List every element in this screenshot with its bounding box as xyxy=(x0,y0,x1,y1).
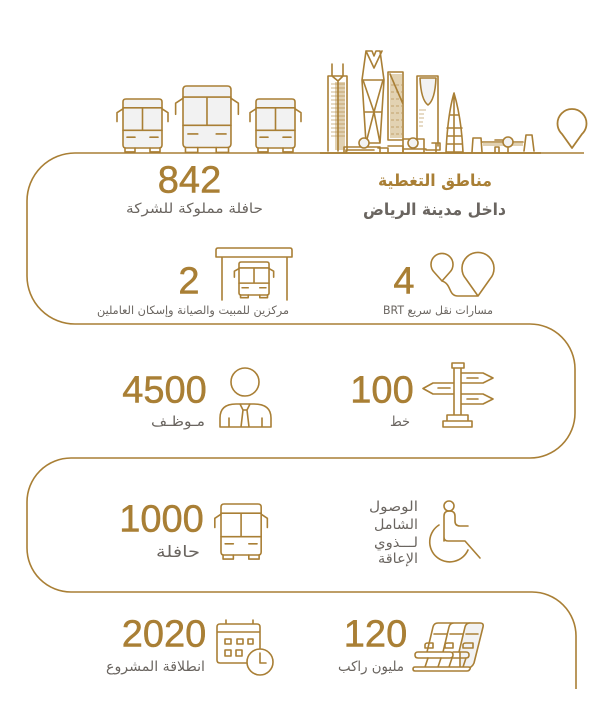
icon: Riyadh skyline xyxy=(320,51,541,153)
text: accessibility: لـــذوي xyxy=(374,535,418,551)
stat: 2020 project launch: انطلاقة المشروع xyxy=(106,659,205,675)
stat: 120 million riders xyxy=(338,614,407,675)
icon: bus depot shelter xyxy=(216,248,292,300)
stat: 842 owned buses: حافلة مملوكة للشركة xyxy=(126,201,263,217)
stat: 2020 project launch xyxy=(106,614,206,675)
stat: 100 lines: 100 xyxy=(350,370,414,412)
stat: 4 BRT routes: مسارات نقل سريع BRT xyxy=(383,303,493,318)
stat: 2 depots: مركزين للمبيت والصيانة وإسكان العاملين xyxy=(97,303,289,318)
stat: 4 BRT routes: 4 xyxy=(393,260,415,302)
icon: signpost xyxy=(423,363,493,427)
winding route line xyxy=(27,153,584,689)
stat: 2020 project launch: 2020 xyxy=(122,614,206,656)
icon: location pin xyxy=(558,109,586,148)
text: accessibility: الإعاقة xyxy=(378,551,418,567)
icon: bus seats xyxy=(413,623,483,671)
stat: 4500 employees xyxy=(122,370,207,430)
stat: 120 million riders: 120 xyxy=(344,614,407,656)
stat: 100 lines xyxy=(350,370,414,430)
text: accessibility: الوصول xyxy=(369,499,418,515)
stat: 2 depots xyxy=(97,260,289,318)
icon: route pins xyxy=(431,252,494,296)
heading: inside Riyadh: داخل مدينة الرياض xyxy=(363,200,506,220)
stat: 4500 employees: مـوظـف xyxy=(151,414,205,430)
text: accessibility: الشامل xyxy=(374,517,418,533)
icon: bus xyxy=(215,504,267,559)
stat: 120 million riders: مليون راكب xyxy=(338,659,404,675)
icon: calendar xyxy=(217,620,273,675)
stat: 1000 buses: حافلة xyxy=(156,542,200,561)
stat: 842 owned buses xyxy=(126,160,263,217)
icon: three buses xyxy=(117,86,301,152)
stat: 842 owned buses: 842 xyxy=(158,160,221,202)
stat: 2 depots: 2 xyxy=(178,260,200,302)
heading: coverage areas: مناطق التغطية xyxy=(378,171,492,191)
stat: 1000 buses: 1000 xyxy=(119,498,204,540)
stat: 100 lines: خط xyxy=(390,414,410,430)
stat: 4 BRT routes xyxy=(383,260,493,318)
text: accessibility xyxy=(369,499,418,567)
stat: 4500 employees: 4500 xyxy=(122,370,207,412)
stat: 1000 buses xyxy=(119,498,204,561)
icon: wheelchair xyxy=(430,501,480,562)
icon: employee xyxy=(220,368,271,427)
